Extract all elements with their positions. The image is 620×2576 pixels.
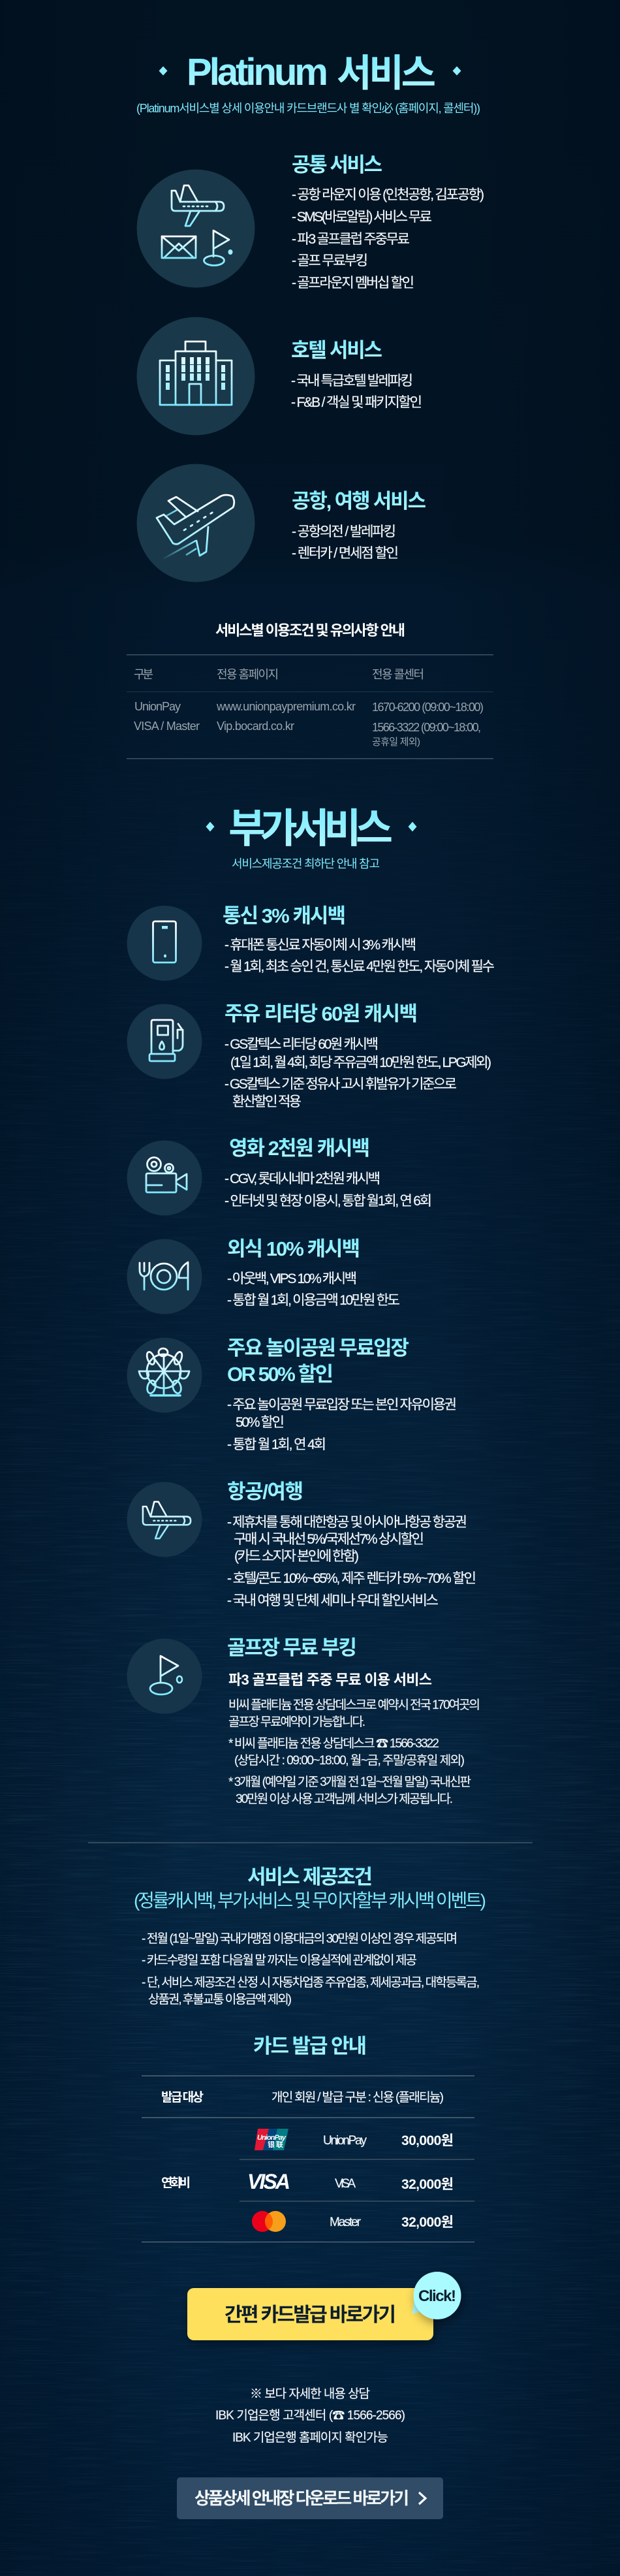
title: 부가서비스: 부가서비스	[228, 806, 393, 851]
bullet list: - SMS(바로알림) 서비스 무료	[292, 210, 432, 225]
bullet list: - 공항 라운지 이용 (인천공항, 김포공항)	[292, 187, 484, 202]
bullet list	[227, 1271, 400, 1308]
bullet list: - 주요 놀이공원 무료입장 또는 본인 자유이용권	[227, 1397, 457, 1412]
bullet list: 구매 시 국내선 5%/국제선7% 상시할인	[234, 1532, 424, 1547]
bullet list: - 인터넷 및 현장 이용시, 통합 월1회, 연 6회	[225, 1194, 432, 1209]
bullet list: - 휴대폰 통신료 자동이체 시 3% 캐시백	[225, 938, 416, 953]
logo: UnionPay	[255, 2129, 288, 2150]
icon: plane taking off	[137, 464, 255, 582]
bullet list	[225, 938, 495, 974]
description text: * 비씨 플래티늄 전용 상담데스크 ☎ 1566-3322	[228, 1736, 439, 1751]
bullet list: - 호텔/콘도 10%~65%, 제주 렌터카 5%~70% 할인	[227, 1571, 476, 1586]
panel: 외식 10% 캐시백	[127, 1237, 400, 1314]
callout: Click!	[412, 2272, 461, 2319]
text block: 상담 안내: IBK 기업은행 홈페이지 확인가능	[232, 2430, 388, 2445]
text block: 상담 안내: IBK 기업은행 고객센터 (☎ 1566-2566)	[215, 2408, 405, 2423]
heading	[134, 1866, 486, 1911]
table: 서비스별 이용조건 및 유의사항 안내	[127, 622, 493, 759]
sub heading: 파3 골프클럽 주중 무료 이용 서비스	[228, 1672, 432, 1688]
title: Platinum 서비스	[159, 51, 461, 95]
description text: 30만원 이상 사용 고객님께 서비스가 제공됩니다.	[236, 1792, 453, 1806]
bullet list: - 국내 여행 및 단체 세미나 우대 할인서비스	[227, 1593, 439, 1608]
text block: 상담 안내: ※ 보다 자세한 내용 상담	[250, 2387, 370, 2401]
bullet list: - 아웃백, VIPS 10% 캐시백	[227, 1271, 357, 1286]
description text: 골프장 무료예약이 가능합니다.	[228, 1715, 365, 1729]
table header row	[134, 668, 424, 681]
bullet list: - F&B / 객실 및 패키지할인	[291, 395, 422, 410]
table header row: 전용 콜센터	[372, 668, 424, 681]
icon: fork, plate, knife	[127, 1239, 202, 1314]
panel: 영화 2천원 캐시백	[127, 1137, 432, 1216]
conditions list: - 카드수령일 포함 다음월 말 까지는 이용실적에 관계없이 제공	[142, 1953, 417, 1967]
bullet list: - 공항의전 / 발레파킹	[292, 524, 396, 539]
section: 카드 발급 안내	[142, 2035, 474, 2242]
button: 간편 카드발급 바로가기: 간편 카드발급 바로가기	[225, 2304, 396, 2326]
icon: hotel building	[137, 317, 255, 435]
bullet list: - 국내 특급호텔 발레파킹	[291, 374, 413, 389]
row: Master: Master	[330, 2216, 362, 2229]
text block: 상담 안내	[215, 2387, 405, 2445]
bullet list	[292, 187, 484, 291]
title: Platinum 서비스: 서비스	[337, 52, 436, 95]
bullet list	[225, 1037, 491, 1109]
row: VISA / Master: 공휴일 제외)	[372, 737, 420, 748]
row: VISA / Master: 1566-3322 (09:00~18:00,	[372, 721, 481, 734]
bullet list	[291, 374, 422, 410]
heading: 외식 10% 캐시백	[227, 1237, 360, 1260]
bullet list: - GS칼텍스 기준 정유사 고시 휘발유가 기준으로	[225, 1077, 457, 1092]
panel: 공항, 여행 서비스	[137, 464, 426, 582]
subtitle: (Platinum서비스별 상세 이용안내 카드브랜드사 별 확인必 (홈페이지, 콜센터))	[136, 102, 480, 115]
table header row: 전용 홈페이지	[217, 668, 279, 681]
panel: 골프장 무료 부킹	[127, 1636, 480, 1806]
heading: 항공/여행	[227, 1480, 303, 1503]
bullet list	[292, 524, 399, 561]
bullet list: - 월 1회, 최초 승인 건, 통신료 4만원 한도, 자동이체 필수	[225, 959, 495, 974]
description text: * 3개월 (예약일 기준 3개월 전 1일~전월 말일) 국내신판	[228, 1775, 471, 1789]
conditions list: - 단, 서비스 제공조건 산정 시 자동차업종 주유업종, 제세공과금, 대학등록금,	[142, 1975, 480, 1990]
row: 발급 대상: 개인 회원 / 발급 구분 : 신용 (플래티늄)	[271, 2090, 444, 2105]
panel: 주요 놀이공원	[127, 1337, 457, 1452]
bullet list	[225, 1171, 432, 1209]
heading: 주유 리터당 60원 캐시백	[225, 1002, 418, 1025]
row: 발급 대상	[161, 2090, 444, 2105]
bullet list: - 골프라운지 멤버십 할인	[292, 276, 414, 291]
row: 발급 대상: 발급 대상	[161, 2090, 204, 2105]
conditions list: - 전월 (1일~말일) 국내가맹점 이용대금의 30만원 이상인 경우 제공되며	[142, 1932, 457, 1946]
bullet list: - 제휴처를 통해 대한항공 및 아시아나항공 항공권	[227, 1515, 467, 1530]
panel: 공통 서비스	[137, 153, 484, 291]
logo: VISA: VISA	[247, 2170, 290, 2193]
bullet list	[227, 1515, 476, 1608]
heading: 카드 발급 안내	[253, 2035, 367, 2058]
icon: plane, envelope, golf flag	[137, 170, 255, 287]
heading: 골프장 무료 부킹	[227, 1636, 357, 1659]
panel: 항공/여행	[127, 1480, 476, 1608]
row: UnionPay: 30,000원	[401, 2133, 454, 2148]
row: VISA	[247, 2170, 454, 2193]
row: UnionPay: www.unionpaypremium.co.kr	[216, 700, 356, 713]
icon: gas pump	[127, 1004, 202, 1079]
heading: 호텔 서비스	[291, 339, 382, 362]
row: UnionPay	[255, 2129, 454, 2150]
heading	[227, 1337, 409, 1386]
icon: plane	[127, 1482, 202, 1557]
heading: 영화 2천원 캐시백	[229, 1137, 370, 1160]
heading: 공항, 여행 서비스	[292, 490, 426, 513]
heading: OR 50% 할인	[227, 1363, 333, 1386]
bullet list: (1일 1회, 월 4회, 회당 주유금액 10만원 한도, LPG제외)	[230, 1055, 491, 1070]
button: 상품상세 안내장 다운로드	[177, 2477, 443, 2519]
heading: 통신 3% 캐시백	[223, 904, 346, 927]
callout: Click!: Click!	[418, 2287, 456, 2305]
section: 서비스 제공조건	[134, 1866, 486, 2007]
row: UnionPay: UnionPay	[134, 700, 181, 713]
row: UnionPay	[134, 700, 484, 714]
bullet list: - CGV, 롯데시네마 2천원 캐시백	[225, 1171, 380, 1186]
bullet list: 50% 할인	[236, 1415, 285, 1430]
row: VISA: 32,000원	[401, 2177, 454, 2192]
panel: 주유 리터당 60원 캐시백	[127, 1002, 491, 1109]
button: 간편 카드발급 바로가기	[187, 2272, 461, 2340]
bullet list: - 렌터카 / 면세점 할인	[292, 546, 399, 561]
row: VISA / Master: VISA / Master	[134, 720, 200, 733]
row: UnionPay: UnionPay	[323, 2134, 367, 2148]
bullet list: (카드 소지자 본인에 한함)	[234, 1549, 359, 1564]
conditions list	[142, 1932, 480, 2007]
row: Master	[252, 2211, 454, 2232]
icon: movie camera	[127, 1140, 202, 1216]
bullet list: - 통합 월 1회, 이용금액 10만원 한도	[227, 1293, 400, 1308]
icon: golf flag	[127, 1639, 202, 1713]
panel: 통신 3% 캐시백	[127, 904, 495, 981]
panel: 호텔 서비스	[137, 317, 422, 435]
description text: 비씨 플래티늄 전용 상담데스크로 예약시 전국 170여곳의	[228, 1698, 480, 1712]
row: VISA: VISA	[335, 2177, 356, 2191]
icon: phone	[127, 906, 202, 981]
heading: (정률캐시백, 부가서비스 및 무이자할부 캐시백 이벤트)	[134, 1890, 486, 1911]
logo: UnionPay: 银联	[268, 2140, 283, 2149]
row: VISA / Master: Vip.bocard.co.kr	[217, 720, 294, 733]
description text	[228, 1698, 480, 1806]
heading: 공통 서비스	[292, 153, 382, 176]
row: Master: 32,000원	[401, 2215, 454, 2230]
bullet list: - GS칼텍스 리터당 60원 캐시백	[225, 1037, 379, 1052]
description text: (상담시간 : 09:00~18:00, 월~금, 주말/공휴일 제외)	[234, 1753, 465, 1768]
table title: 서비스별 이용조건 및 유의사항 안내	[215, 622, 405, 639]
button: 상품상세 안내장 다운로드: 상품상세 안내장 다운로드 바로가기	[194, 2489, 409, 2508]
icon: chevron	[419, 2492, 426, 2504]
bullet list	[227, 1397, 457, 1452]
label: 연회비: 연회비	[161, 2176, 191, 2190]
title: Platinum 서비스: Platinum	[187, 51, 328, 93]
logo: UnionPay: UnionPay	[257, 2134, 287, 2142]
heading: 주요 놀이공원 무료입장	[227, 1337, 409, 1360]
heading: 서비스 제공조건	[247, 1866, 373, 1888]
bullet list: - 파3 골프클럽 주중무료	[292, 232, 410, 247]
bullet list: 환산할인 적용	[232, 1094, 302, 1109]
bullet list: - 통합 월 1회, 연 4회	[227, 1437, 326, 1452]
icon: ferris wheel	[127, 1337, 202, 1413]
table header row: 구분	[134, 668, 153, 681]
logo: Mastercard	[252, 2211, 286, 2232]
row: VISA / Master	[134, 720, 481, 748]
conditions list: 상품권, 후불교통 이용금액 제외)	[148, 1992, 292, 2007]
bullet list: - 골프 무료부킹	[292, 253, 368, 268]
subtitle: 서비스제공조건 최하단 안내 참고	[232, 857, 380, 870]
row: UnionPay: 1670-6200 (09:00~18:00)	[372, 701, 484, 714]
section: Platinum 서비스	[127, 51, 493, 759]
page background	[0, 640, 620, 2576]
section: 부가서비스	[127, 806, 495, 1806]
